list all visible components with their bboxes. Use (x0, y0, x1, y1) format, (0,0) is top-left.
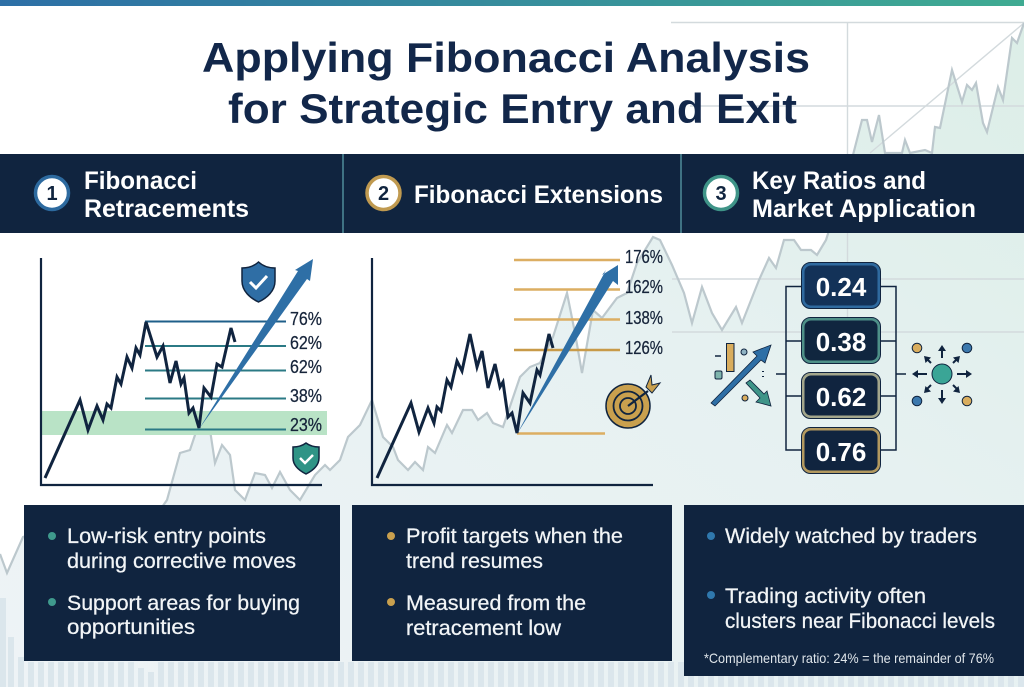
title: Applying Fibonacci Analysis (202, 34, 810, 81)
icon: teal shield (293, 443, 319, 474)
panel: market application notes: Widely watched by traders (725, 525, 977, 548)
retracement labels: 62% (290, 333, 322, 353)
ratio 0.62 (802, 372, 880, 418)
retracement labels (290, 309, 322, 435)
retracement labels: 76% (290, 309, 322, 329)
arrow: uptrend (199, 259, 313, 429)
ratio 0.38 (802, 318, 880, 364)
panel: market application notes: Trading activity often (725, 585, 926, 608)
header 2: Fibonacci Extensions: Fibonacci Extensions (414, 181, 663, 209)
panel: market application notes: clusters near Fibonacci levels (725, 610, 995, 633)
header 1: Fibonacci Retracements: 1 (46, 183, 58, 205)
panel: retracement notes: opportunities (67, 616, 195, 639)
header 2: Fibonacci Extensions (367, 176, 663, 210)
section header band (0, 154, 1024, 233)
panel: retracement notes (24, 505, 340, 661)
icon: radiating network (912, 343, 972, 406)
extension labels: 162% (625, 277, 663, 297)
extension labels (625, 247, 663, 358)
icon: target with arrow (606, 375, 660, 428)
header 2: Fibonacci Extensions: 2 (378, 183, 389, 205)
icon: blue shield (242, 262, 275, 302)
panel: extension notes: Profit targets when the (406, 525, 623, 548)
ratio 0.38: 0.38 (816, 327, 866, 357)
panel: retracement notes: Support areas for buying (67, 592, 300, 615)
retracement labels: 38% (290, 386, 322, 406)
diagram: key ratios (711, 262, 972, 474)
extension labels: 176% (625, 247, 663, 267)
header 1: Fibonacci Retracements: Fibonacci (84, 167, 197, 195)
header 3: Key Ratios and Market Application: Market Application (752, 195, 976, 223)
footnote: *Complementary ratio: 24% = the remainder of 76% (704, 650, 994, 666)
top gradient bar (0, 0, 1024, 6)
icon: percent arrows (711, 344, 771, 406)
ratio 0.76: 0.76 (816, 437, 866, 467)
price line (377, 334, 553, 478)
panel: extension notes (352, 505, 672, 661)
chart: Fibonacci extensions (372, 247, 663, 485)
arrow: extension target (517, 265, 618, 434)
retracement labels: 23% (290, 415, 322, 435)
panel: retracement notes: during corrective moves (67, 550, 296, 573)
header 3: Key Ratios and Market Application: 3 (715, 183, 727, 205)
extension labels: 126% (625, 338, 663, 358)
ratio 0.62: 0.62 (816, 382, 866, 412)
panel: extension notes: trend resumes (406, 550, 543, 573)
panel: market application notes (684, 505, 1024, 676)
header 1: Fibonacci Retracements: Retracements (84, 195, 249, 223)
chart: Fibonacci retracements (41, 258, 327, 485)
header 1: Fibonacci Retracements (36, 167, 249, 223)
extension labels: 138% (625, 308, 663, 328)
price line (45, 322, 235, 478)
panel: retracement notes: Low-risk entry points (67, 525, 266, 548)
title (202, 34, 810, 132)
title: for Strategic Entry and Exit (228, 85, 797, 132)
panel: extension notes: retracement low (406, 617, 562, 640)
ratio 0.24: 0.24 (816, 272, 867, 302)
ratio 0.76 (802, 428, 880, 474)
ratio 0.24 (802, 262, 880, 308)
header 3: Key Ratios and Market Application (704, 167, 976, 223)
panel: extension notes: Measured from the (406, 592, 586, 615)
header 3: Key Ratios and Market Application: Key Ratios and (752, 167, 926, 195)
retracement labels: 62% (290, 357, 322, 377)
